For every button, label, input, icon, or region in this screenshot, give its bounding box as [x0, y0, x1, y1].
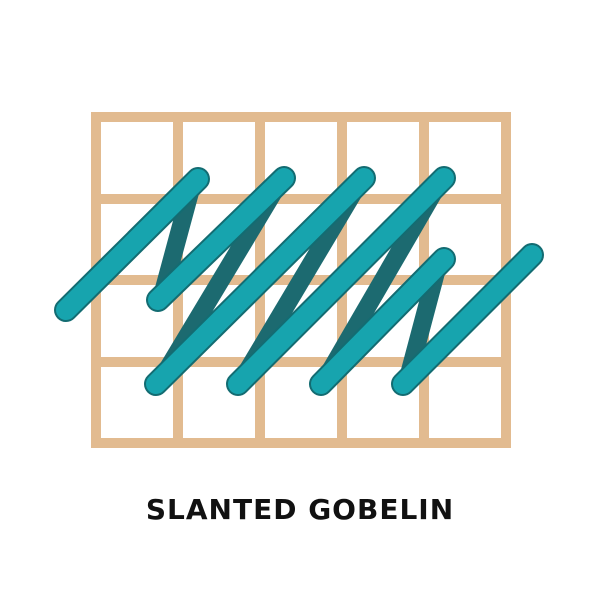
canvas grid — [96, 117, 506, 443]
front stitches (light teal) — [66, 178, 532, 384]
back stitches (dark) — [162, 185, 438, 378]
title: SLANTED GOBELIN — [146, 493, 454, 526]
